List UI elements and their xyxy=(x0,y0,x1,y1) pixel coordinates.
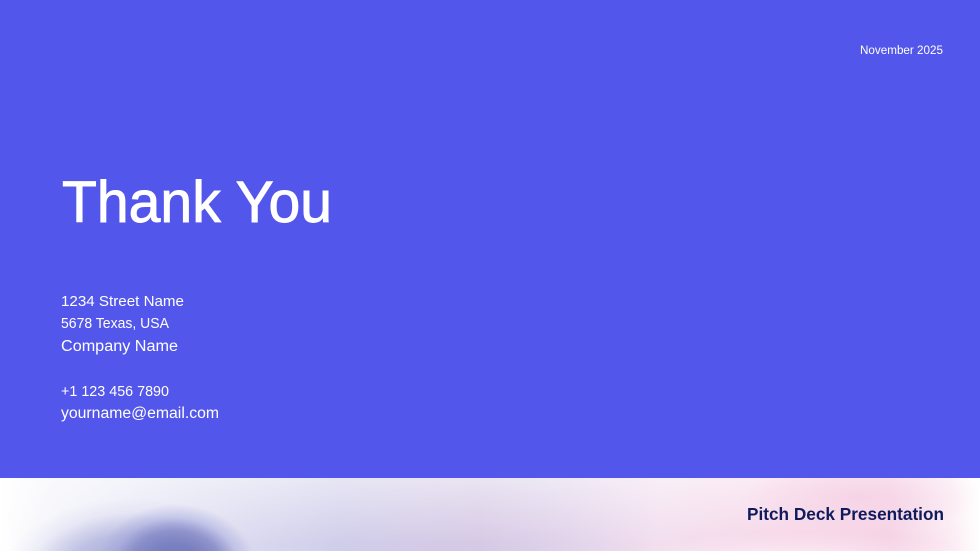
gradient footer band xyxy=(0,478,980,551)
title: Thank You xyxy=(62,170,332,235)
company name: Company Name xyxy=(61,338,178,355)
footer label: Pitch Deck Presentation xyxy=(747,504,944,524)
phone number: +1 123 456 7890 xyxy=(61,384,169,400)
city and state: 5678 Texas, USA xyxy=(61,316,169,332)
date: November 2025 xyxy=(860,45,943,57)
street address: 1234 Street Name xyxy=(61,293,184,310)
email address: yourname@email.com xyxy=(61,405,219,422)
contact details xyxy=(61,293,219,422)
